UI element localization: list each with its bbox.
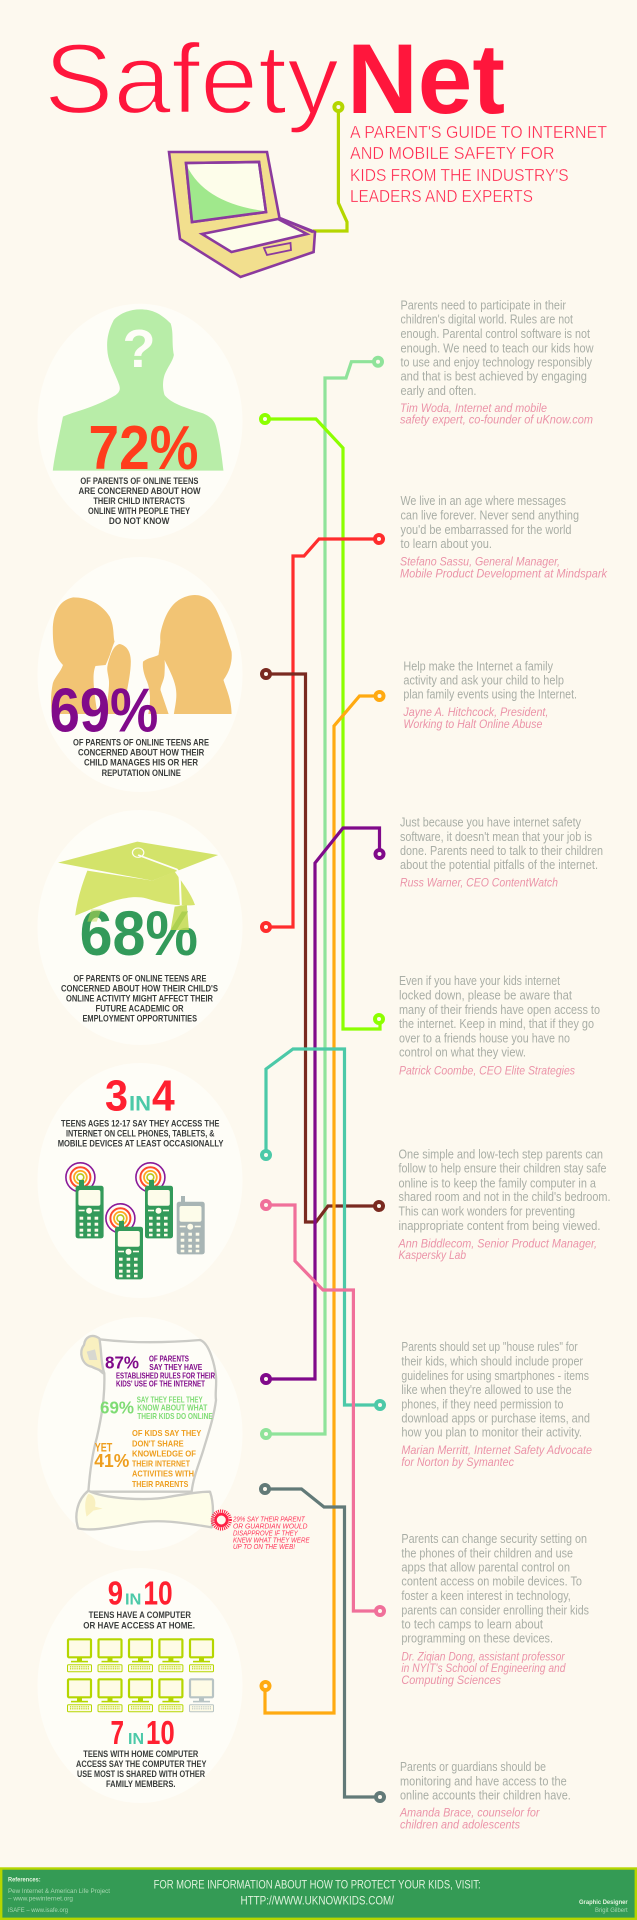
panel: 72% stat [53, 309, 223, 526]
quote: Ziqian Dong: programming on these devices. [401, 1632, 553, 1646]
call to action: HTTP://WWW.UKNOWKIDS.COM/ [240, 1896, 395, 1908]
3 in 4 figure: IN [129, 1093, 151, 1116]
quote: Russ Warner: Just because you have internet safety [400, 816, 582, 830]
quote: Ziqian Dong: parents can consider enrolling their kids [401, 1603, 589, 1617]
quote: Patrick Coombe: Patrick Coombe, CEO Elite Strategies [399, 1063, 575, 1077]
quote: Marian Merritt: guidelines for using smartphones - items [401, 1369, 589, 1383]
quote: Amanda Brace [399, 1760, 571, 1831]
references: iSAFE – www.isafe.org [8, 1907, 68, 1914]
caption: 7 in 10 [76, 1749, 206, 1789]
caption [78, 476, 201, 526]
87% block: SAY THEY HAVE [149, 1362, 203, 1372]
designer credit: Brigit Gilbert [595, 1907, 628, 1914]
41% block: KNOWLEDGE OF [132, 1449, 196, 1459]
quote: Ann Biddlecom: shared room and not in the child's bedroom. [398, 1190, 610, 1204]
icon: laptop [169, 152, 315, 277]
quote: Tim Woda: enough. We need to teach our kids how [400, 341, 594, 355]
icon: mobile phones [66, 1163, 205, 1279]
quote: Amanda Brace: children and adolescents [400, 1817, 520, 1831]
7 in 10 figure [110, 1714, 175, 1751]
designer credit [579, 1899, 628, 1914]
quote: Ziqian Dong: in NYIT's School of Engineering and [401, 1661, 566, 1675]
icon: computers [68, 1639, 214, 1712]
quote: Tim Woda: early and often. [400, 384, 476, 398]
quote: Ann Biddlecom: online is to keep the family computer in a [398, 1176, 596, 1190]
41% block: ACTIVITIES WITH [132, 1469, 194, 1479]
quote: Amanda Brace: monitoring and have access to the [400, 1774, 567, 1788]
callout: 29%: 29% SAY THEIR PARENT [232, 1515, 305, 1524]
quote: Tim Woda: and that is best achieved by engaging [400, 370, 587, 384]
69% figure: 69% [50, 677, 158, 746]
72% figure: 72% [88, 414, 198, 483]
panel: 68% stat [58, 842, 218, 1024]
call to action [154, 1879, 481, 1908]
quote: Russ Warner: software, it doesn't mean that your job is [400, 830, 592, 844]
quote: Ziqian Dong: content access on mobile devices. To [401, 1575, 582, 1589]
69% block: 69% [100, 1397, 134, 1417]
7 in 10 figure: IN [128, 1731, 144, 1748]
quote: Stefano Sassu: you'd be embarrassed for the world [400, 523, 572, 537]
caption: INTERNET ON CELL PHONES, TABLETS, & [66, 1128, 215, 1138]
caption: CONCERNED ABOUT HOW THEIR [78, 747, 205, 757]
quote: Patrick Coombe: many of their friends have open access to [399, 1003, 600, 1017]
69% block: THEIR KIDS DO ONLINE [137, 1411, 213, 1421]
subtitle: KIDS FROM THE INDUSTRY'S [350, 165, 569, 185]
quote: Ziqian Dong: foster a keen interest in technology, [401, 1589, 571, 1603]
subtitle: LEADERS AND EXPERTS [350, 186, 533, 206]
41% block [94, 1428, 202, 1489]
quote: Amanda Brace: Parents or guardians should be [400, 1760, 546, 1774]
quote: Ann Biddlecom [398, 1147, 610, 1262]
quote: Marian Merritt: Parents should set up "house rules" for [401, 1340, 578, 1354]
quote: Marian Merritt: their kids, which should include proper [401, 1355, 583, 1369]
quote: Ann Biddlecom: This can work wonders for preventing [398, 1205, 575, 1219]
panel: 69% stat [50, 595, 232, 778]
3 in 4 figure: 3 [105, 1072, 128, 1121]
quote: Jayne A. Hitchcock: Working to Halt Online Abuse [403, 717, 543, 731]
7 in 10 figure: 7 [110, 1714, 124, 1751]
quote: Tim Woda: enough. Parental control software is not [400, 327, 590, 341]
question mark: ? [122, 319, 156, 379]
callout: 29%: DISAPPROVE IF THEY [233, 1529, 299, 1538]
panel: home computer stats [68, 1574, 214, 1789]
caption: OF PARENTS OF ONLINE TEENS ARE [73, 738, 209, 748]
panel backgrounds: ovals [38, 304, 242, 1803]
connector lines [261, 358, 384, 1801]
icon: red burst [212, 1511, 230, 1529]
callout: 29%: KNEW WHAT THEY WERE [233, 1535, 310, 1544]
quote: Ziqian Dong [401, 1532, 589, 1687]
caption: ARE CONCERNED ABOUT HOW [78, 486, 201, 496]
69% block [100, 1394, 213, 1421]
callout: 29%: OR GUARDIAN WOULD [233, 1521, 308, 1530]
references: Pew Internet & American Life Project [8, 1888, 110, 1895]
caption: MOBILE DEVICES AT LEAST OCCASIONALLY [58, 1138, 223, 1148]
quote: Stefano Sassu: can live forever. Never send anything [400, 508, 579, 522]
quote: Patrick Coombe: Even if you have your kids internet [399, 974, 560, 988]
quote: Tim Woda: Tim Woda, Internet and mobile [400, 401, 547, 415]
quote: Tim Woda: Parents need to participate in their [400, 298, 566, 312]
41% block: 41% [94, 1450, 129, 1471]
caption: 9 in 10: TEENS HAVE A COMPUTER [89, 1610, 191, 1620]
icon: graduation cap [58, 842, 218, 930]
subtitle [350, 122, 607, 206]
quote: Ann Biddlecom: Kaspersky Lab [398, 1248, 466, 1262]
quote: Ziqian Dong: apps that allow parental control on [401, 1560, 570, 1574]
quote: Russ Warner: done. Parents need to talk to their children [400, 844, 603, 858]
87% block: KIDS' USE OF THE INTERNET [116, 1379, 206, 1389]
title: Net [347, 23, 505, 134]
caption [61, 973, 218, 1024]
quote: Marian Merritt: download apps or purchase items, and [401, 1412, 590, 1426]
callout: 29% [232, 1515, 310, 1551]
icon: person silhouette [53, 309, 223, 471]
quote: Jayne A. Hitchcock: plan family events using the Internet. [403, 688, 577, 702]
3 in 4 figure: 4 [152, 1072, 175, 1121]
caption: 9 in 10 [83, 1610, 195, 1630]
quote: Amanda Brace: online accounts their children have. [400, 1788, 571, 1802]
callout: 29%: UP TO ON THE WEB! [233, 1542, 295, 1551]
quote: Ann Biddlecom: Ann Biddlecom, Senior Product Manager, [398, 1237, 597, 1251]
caption: DO NOT KNOW [109, 516, 170, 526]
69% block: SAY THEY FEEL THEY [137, 1394, 203, 1404]
87% block [105, 1352, 215, 1389]
quote: Jayne A. Hitchcock: Help make the Internet a family [403, 659, 554, 673]
87% block: 87% [105, 1352, 139, 1372]
quote: Russ Warner [400, 816, 603, 890]
69% block: KNOW ABOUT WHAT [137, 1403, 208, 1413]
caption: 7 in 10: ACCESS SAY THE COMPUTER THEY [76, 1759, 206, 1769]
quote: Jayne A. Hitchcock: Jayne A. Hitchcock, President, [403, 705, 548, 719]
subtitle: AND MOBILE SAFETY FOR [350, 143, 554, 163]
caption: 7 in 10: FAMILY MEMBERS. [106, 1779, 176, 1789]
caption: OF PARENTS OF ONLINE TEENS ARE [74, 973, 206, 983]
references: – www.pewinternet.org [8, 1896, 73, 1903]
quote: Patrick Coombe [399, 974, 600, 1077]
quote: Stefano Sassu [400, 494, 608, 580]
quote: Ann Biddlecom: One simple and low-tech step parents can [398, 1147, 603, 1161]
quote: Russ Warner: about the potential pitfalls of the internet. [400, 858, 598, 872]
quote: Marian Merritt: phones, if they need permission to [401, 1397, 563, 1411]
quote: Marian Merritt: Marian Merritt, Internet Safety Advocate [401, 1443, 592, 1457]
caption: ONLINE WITH PEOPLE THEY [88, 506, 190, 516]
quote: Jayne A. Hitchcock: activity and ask your child to help [403, 673, 564, 687]
quote: Tim Woda: to use and enjoy technology responsibly [400, 355, 593, 369]
caption [73, 738, 209, 778]
quote: Marian Merritt: for Norton by Symantec [401, 1455, 514, 1469]
quote: Ziqian Dong: the phones of their children and use [401, 1546, 573, 1560]
quote: Ziqian Dong: Dr. Ziqian Dong, assistant professor [401, 1650, 566, 1664]
quote: Russ Warner: Russ Warner, CEO ContentWatch [400, 876, 558, 890]
41% block: DON'T SHARE [132, 1438, 184, 1448]
quote: Ziqian Dong: Computing Sciences [401, 1673, 501, 1687]
7 in 10 figure: 10 [146, 1714, 175, 1751]
caption: EMPLOYMENT OPPORTUNITIES [82, 1014, 197, 1024]
caption: FUTURE ACADEMIC OR [96, 1003, 184, 1013]
icon: scroll [76, 1336, 216, 1529]
quote: Tim Woda: children's digital world. Rules are not [400, 313, 573, 327]
3 in 4 figure [105, 1072, 175, 1121]
41% block: THEIR PARENTS [132, 1479, 189, 1489]
caption: 9 in 10: OR HAVE ACCESS AT HOME. [83, 1620, 195, 1630]
subtitle: A PARENT'S GUIDE TO INTERNET [350, 122, 607, 142]
quote: Tim Woda [400, 298, 594, 427]
quote: Marian Merritt [401, 1340, 592, 1469]
caption: ONLINE ACTIVITY MIGHT AFFECT THEIR [66, 993, 213, 1003]
call to action: FOR MORE INFORMATION ABOUT HOW TO PROTECT YOUR KIDS, VISIT: [154, 1879, 481, 1891]
references: References: [8, 1877, 41, 1884]
87% block: OF PARENTS [149, 1353, 189, 1363]
footer banner [1, 1868, 636, 1919]
caption: CHILD MANAGES HIS OR HER [84, 758, 198, 768]
9 in 10 figure: IN [125, 1591, 141, 1608]
quote: Ziqian Dong: to tech camps to learn about [401, 1618, 543, 1632]
title [44, 23, 505, 134]
icon: parent and child silhouettes [51, 595, 232, 714]
41% block: YET [95, 1441, 113, 1455]
quote: Patrick Coombe: the internet. Keep in mind, that if they go [399, 1017, 594, 1031]
designer credit: Graphic Designer [579, 1899, 628, 1906]
panel: scroll stats [76, 1336, 310, 1551]
quote: Stefano Sassu: Stefano Sassu, General Manager, [400, 555, 560, 569]
caption: 7 in 10: TEENS WITH HOME COMPUTER [83, 1749, 199, 1759]
quote: Patrick Coombe: over to a friends house you have no [399, 1031, 570, 1045]
quote: Patrick Coombe: control on what they view. [399, 1046, 526, 1060]
68% figure: 68% [80, 899, 198, 969]
87% block: ESTABLISHED RULES FOR THEIR [116, 1370, 215, 1380]
41% block: THEIR INTERNET [132, 1459, 191, 1469]
quote: Amanda Brace: Amanda Brace, counselor for [399, 1806, 540, 1820]
caption: 7 in 10: USE MOST IS SHARED WITH OTHER [77, 1769, 205, 1779]
caption: REPUTATION ONLINE [102, 768, 181, 778]
title: Safety [44, 23, 340, 134]
panel: 3 in 4 stat [58, 1072, 223, 1279]
quote: Stefano Sassu: to learn about you. [400, 537, 492, 551]
9 in 10 figure: 10 [143, 1574, 173, 1611]
9 in 10 figure [108, 1574, 173, 1611]
references [8, 1877, 110, 1914]
quote: Ann Biddlecom: follow to help ensure their children stay safe [398, 1162, 607, 1176]
quote: Stefano Sassu: We live in an age where messages [400, 494, 566, 508]
quote: Jayne A. Hitchcock [403, 659, 577, 731]
quote: Marian Merritt: how you plan to monitor their activity. [401, 1426, 582, 1440]
41% block: OF KIDS SAY THEY [132, 1428, 202, 1438]
9 in 10 figure: 9 [108, 1574, 123, 1611]
quote: Patrick Coombe: locked down, please be aware that [399, 989, 572, 1003]
caption: THEIR CHILD INTERACTS [93, 496, 185, 506]
caption: CONCERNED ABOUT HOW THEIR CHILD'S [61, 983, 218, 993]
caption [58, 1118, 223, 1148]
laptop connector line [313, 103, 347, 231]
caption: TEENS AGES 12-17 SAY THEY ACCESS THE [61, 1118, 219, 1128]
caption: OF PARENTS OF ONLINE TEENS [80, 476, 198, 486]
quote: Ann Biddlecom: inappropriate content from being viewed. [398, 1219, 600, 1233]
quote: Marian Merritt: like when they're allowed to use the [401, 1383, 572, 1397]
quote: Ziqian Dong: Parents can change security setting on [401, 1532, 587, 1546]
quote: Stefano Sassu: Mobile Product Development at Mindspark [400, 566, 608, 580]
quote: Tim Woda: safety expert, co-founder of uKnow.com [400, 413, 593, 427]
